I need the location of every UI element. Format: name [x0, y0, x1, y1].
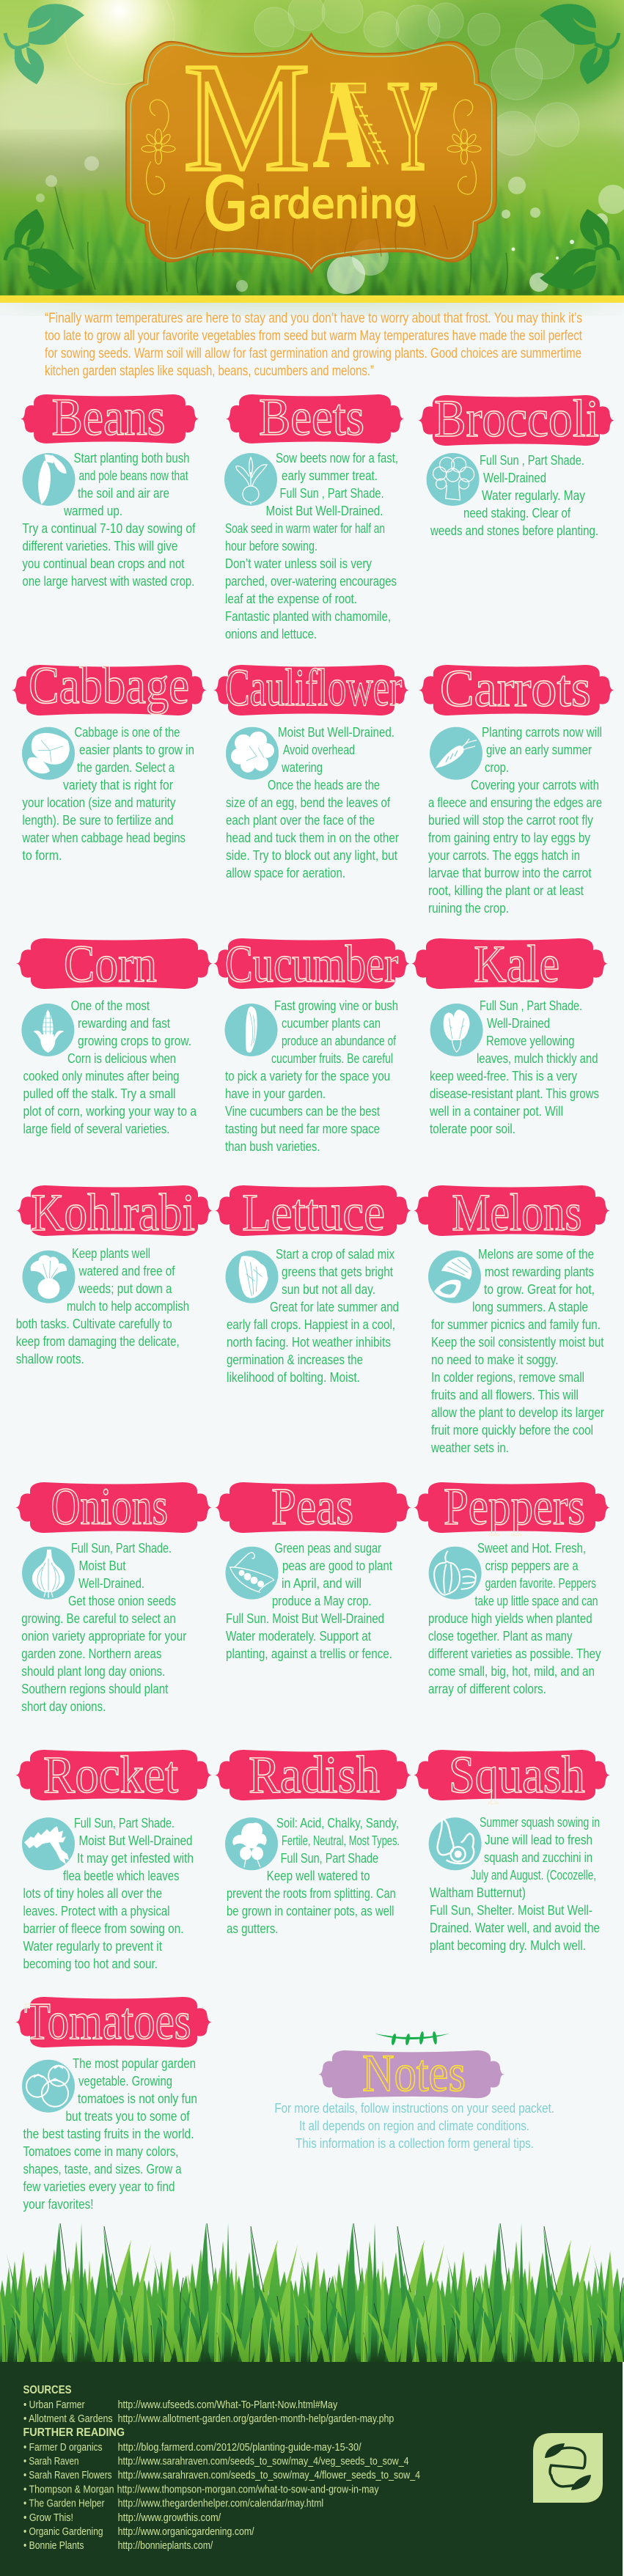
icon: rocket leaf [22, 1817, 75, 1870]
text: Rocket: Water regularly to prevent it [23, 1938, 162, 1954]
icon: beans [22, 453, 75, 506]
text: notes: This information is a collection form general tips. [296, 2135, 534, 2151]
heading: sources: SOURCES [23, 2384, 72, 2396]
text: Beets: hour before sowing. [225, 538, 317, 553]
text: Rocket: barrier of fleece from sowing on. [23, 1921, 183, 1936]
icon: melon [428, 1251, 481, 1303]
heading: Peas [215, 1477, 411, 1536]
text: Peppers: crisp peppers are a [485, 1558, 579, 1573]
text: Carrots: ruining the crop. [428, 900, 509, 916]
text: Beans: different varieties. This will give [22, 538, 177, 553]
text: Kale: leaves, mulch thickly and [477, 1050, 598, 1066]
text: Cauliflower: Once the heads are the [268, 777, 380, 792]
text: Cucumber [225, 998, 398, 1154]
text: Peas: Water moderately. Support at [226, 1628, 371, 1644]
list: sources: http://www.ufseeds.com/What-To-Plant-Now.html#May [118, 2399, 338, 2411]
list: further reading: http://www.organicgardening.com/ [118, 2526, 254, 2538]
heading: Corn: Corn [64, 935, 157, 993]
text: Kale: tolerate poor soil. [430, 1121, 515, 1136]
text: Corn [23, 998, 197, 1136]
panel: Carrots [419, 659, 614, 916]
text: Melons: fruits and all flowers. This will [431, 1387, 579, 1402]
text: Beets: Sow beets now for a fast, [276, 450, 398, 465]
text: Cabbage: easier plants to grow in [79, 742, 194, 757]
text: Melons: long summers. A staple [472, 1299, 588, 1314]
text: Melons: no need to make it soggy. [431, 1352, 559, 1367]
text: Peas: planting, against a trellis or fence. [226, 1646, 392, 1661]
text: Onions [21, 1540, 186, 1714]
text: Onions: Moist But [79, 1558, 126, 1573]
text: Corn: One of the most [71, 998, 150, 1013]
list: further reading: • Sarah Raven Flowers [23, 2470, 111, 2481]
panel: Squash [414, 1745, 610, 1953]
text: Cabbage: Cabbage is one of the [75, 724, 180, 740]
heading: Cabbage: Cabbage [29, 656, 189, 715]
text: Peas: Full Sun. Moist But Well-Drained [226, 1611, 384, 1626]
text: Kohlrabi: both tasks. Cultivate carefully to [16, 1316, 172, 1331]
text: Onions: growing. Be careful to select an [21, 1611, 176, 1626]
heading: Notes: Notes [362, 2044, 466, 2102]
text: Lettuce: Great for late summer and [270, 1299, 399, 1314]
text: Rocket: flea beetle which leaves [63, 1868, 179, 1883]
icon: onion [22, 1547, 75, 1600]
title: Gardening: G [203, 161, 249, 247]
text: Beets: Full Sun , Part Shade. [280, 485, 384, 501]
icon: broccoli [427, 453, 480, 506]
text: Radish: be grown in container pots, as well [227, 1903, 394, 1918]
intro text: kitchen garden staples like squash, beans, cucumbers and melons.” [45, 363, 374, 379]
text: Onions: garden zone. Northern areas [21, 1646, 161, 1661]
icon: leaf sprig [375, 2031, 449, 2045]
icon: cauliflower [226, 727, 279, 780]
heading: Cucumber: Cucumber [225, 935, 398, 993]
heading: Radish: Radish [249, 1745, 380, 1804]
text: Squash: Waltham Butternut) [430, 1885, 526, 1900]
text: Kale: well in a container pot. Will [429, 1103, 563, 1119]
heading: Beets: Beets [259, 388, 364, 446]
text: Cauliflower [226, 724, 399, 880]
text: Beets: parched, over-watering encourages [225, 573, 397, 589]
text: Cucumber: cucumber plants can [282, 1015, 381, 1031]
list: sources [23, 2399, 394, 2425]
text: Onions: Get those onion seeds [68, 1593, 176, 1608]
text: Cabbage: water when cabbage head begins [22, 830, 186, 845]
title: Gardening: ardening [249, 181, 418, 227]
text: Carrots: Covering your carrots with [471, 777, 599, 792]
text: Peppers: close together. Plant as many [428, 1628, 573, 1644]
heading: Beets [226, 388, 404, 446]
icon: logo [533, 2433, 603, 2503]
icon: tomatoes [22, 2060, 75, 2113]
panel: Tomatoes [15, 1992, 212, 2212]
text: Cauliflower: watering [281, 759, 323, 775]
text: Lettuce [227, 1246, 399, 1385]
heading: Onions: Onions [51, 1477, 168, 1536]
text: Tomatoes: tomatoes is not only fun [78, 2091, 197, 2106]
icon: cucumber [224, 1004, 277, 1056]
text: Cucumber: to pick a variety for the space you [225, 1068, 390, 1083]
text: Radish: Keep well watered to [267, 1868, 370, 1883]
text: Beans [22, 450, 196, 589]
text: Tomatoes [23, 2056, 197, 2212]
icon: corner leaf sprig bottom right [540, 209, 619, 290]
decoration: flower flourish left [142, 100, 175, 194]
text: Radish: Soil: Acid, Chalky, Sandy, [276, 1815, 399, 1830]
list: sources: http://www.allotment-garden.org/garden-month-help/garden-may.php [118, 2413, 394, 2425]
icon: corner leaf sprig bottom left [5, 209, 84, 290]
text: Corn: growing crops to grow. [78, 1033, 191, 1048]
text: Beans: and pole beans now that [79, 468, 188, 483]
text: Onions: Full Sun, Part Shade. [71, 1540, 172, 1556]
icon: carrot [430, 727, 482, 780]
text: Tomatoes: shapes, taste, and sizes. Grow a [23, 2161, 182, 2176]
panel: Radish [215, 1745, 411, 1936]
heading: Kale [411, 935, 608, 993]
heading: Peas: Peas [271, 1477, 353, 1536]
text: Kale: keep weed-free. This is a very [430, 1068, 578, 1083]
text: Cauliflower: size of an egg, bend the leaves of [226, 795, 391, 810]
text: Radish: Fertile, Neutral, Most Types. [282, 1833, 400, 1848]
text: Cabbage: to form. [22, 847, 62, 863]
heading: Squash: Squash [449, 1745, 585, 1804]
text: Cauliflower: allow space for aeration. [226, 865, 345, 880]
heading: Melons: Melons [452, 1183, 582, 1242]
text: Lettuce: germination & increases the [227, 1352, 363, 1367]
text: Lettuce: early fall crops. Happiest in a cool, [227, 1317, 395, 1332]
text: Carrots: root, killing the plant or at least [428, 883, 584, 898]
text: Cabbage: variety that is right for [63, 777, 173, 792]
text: Beets [225, 450, 398, 641]
text: Cabbage: your location (size and maturity [22, 795, 176, 810]
icon: corner leaf sprig top right [540, 4, 619, 84]
icon: squash [429, 1817, 482, 1870]
list: further reading: http://www.sarahraven.com/seeds_to_sow/may_4/flower_seeds_to_sow_4 [118, 2470, 420, 2481]
text: Beets: onions and lettuce. [225, 626, 317, 641]
heading: Broccoli: Broccoli [434, 389, 599, 448]
heading: further reading: FURTHER READING [23, 2426, 125, 2439]
panel: Beets [224, 388, 404, 641]
panel: Peas [215, 1477, 411, 1661]
text: Kohlrabi: watered and free of [78, 1263, 175, 1278]
text: Melons: to grow. Great for hot, [484, 1281, 595, 1297]
text: Cauliflower: Moist But Well-Drained. [278, 724, 394, 740]
text: Lettuce: greens that gets bright [282, 1264, 393, 1279]
illustration: grass [0, 2223, 624, 2362]
panel: Peppers [414, 1477, 610, 1696]
text: Carrots: your carrots. The eggs hatch in [428, 847, 580, 863]
text: Beets: Moist But Well-Drained. [265, 503, 383, 518]
text: Kohlrabi: mulch to help accomplish [67, 1298, 189, 1314]
text: Corn: rewarding and fast [78, 1015, 170, 1031]
text: Squash: squash and zucchini in [484, 1850, 592, 1865]
text: Cucumber: have in your garden. [225, 1086, 326, 1101]
text: Lettuce: sun but not all day. [282, 1281, 375, 1297]
text: Beans: one large harvest with wasted crop. [22, 573, 194, 589]
text: Tomatoes: the best tasting fruits in the world. [23, 2126, 194, 2141]
text: Kale [429, 998, 599, 1136]
text: Carrots: from gaining entry to lay eggs by [428, 830, 591, 845]
list: sources: • Urban Farmer [23, 2399, 85, 2411]
text: Kohlrabi: weeds; put down a [78, 1281, 172, 1296]
text: Squash: plant becoming dry. Mulch well. [430, 1937, 586, 1953]
text: Peas [226, 1540, 392, 1661]
icon: beet [224, 453, 277, 506]
text: Beets: early summer treat. [282, 468, 378, 483]
text: Broccoli [430, 452, 598, 538]
text: Peas: produce a May crop. [272, 1593, 371, 1608]
panel: footer [0, 2362, 623, 2576]
text: Peppers: array of different colors. [428, 1681, 546, 1696]
heading: Peppers: Peppers [444, 1477, 585, 1536]
icon: peppers [429, 1547, 482, 1600]
list: further reading: • Sarah Raven [23, 2456, 79, 2468]
text: Cucumber: cucumber fruits. Be careful [271, 1050, 393, 1066]
heading: Tomatoes: Tomatoes [24, 1992, 191, 2050]
text: Beans: warmed up. [63, 503, 122, 518]
list: further reading: • Grow This! [23, 2512, 73, 2524]
list: further reading: • The Garden Helper [23, 2498, 105, 2510]
heading: Kale: Kale [474, 935, 559, 993]
text: Tomatoes: few varieties every year to find [23, 2179, 175, 2194]
text: Kale: Full Sun , Part Shade. [480, 998, 582, 1013]
text: Tomatoes: Tomatoes come in many colors, [23, 2143, 179, 2159]
panel: Notes [274, 2031, 554, 2151]
text: Radish: Full Sun, Part Shade [281, 1850, 378, 1866]
list: further reading: http://www.sarahraven.com/seeds_to_sow/may_4/veg_seeds_to_sow_4 [118, 2456, 409, 2468]
text: Corn: cooked only minutes after being [23, 1068, 179, 1083]
text: Peas: in April, and will [282, 1575, 361, 1591]
list: further reading: • Farmer D organics [23, 2442, 103, 2454]
text: Cauliflower: side. Try to block out any light, but [226, 847, 397, 863]
text: Tomatoes: The most popular garden [73, 2056, 196, 2071]
text: Cucumber: Vine cucumbers can be the best [225, 1103, 380, 1119]
text: Lettuce: Start a crop of salad mix [276, 1246, 395, 1262]
list: further reading: http://www.thompson-morgan.com/what-to-sow-and-grow-in-may [117, 2484, 379, 2495]
text: Cucumber: than bush varieties. [225, 1138, 320, 1154]
text: Onions: short day onions. [21, 1699, 106, 1714]
text: Broccoli: Well-Drained [483, 470, 546, 485]
text: Beets: Don’t water unless soil is very [225, 556, 372, 571]
text: Corn: plot of corn, working your way to a [23, 1103, 197, 1119]
yellow divider band [0, 295, 624, 303]
text: Kohlrabi: Keep plants well [72, 1245, 150, 1261]
text: Cabbage [22, 724, 194, 863]
text: Peas: peas are good to plant [282, 1558, 392, 1573]
list: further reading: http://blog.farmerd.com/2012/05/planting-guide-may-15-30/ [118, 2442, 361, 2454]
text: Rocket: becoming too hot and sour. [23, 1956, 158, 1971]
title: May: M [183, 31, 310, 203]
panel: Onions [15, 1477, 212, 1714]
text: Corn: Corn is delicious when [67, 1050, 176, 1066]
text: Radish [227, 1815, 400, 1936]
text: Cauliflower: each plant over the face of the [226, 812, 375, 828]
text: notes [274, 2100, 554, 2151]
icon: radish [225, 1817, 278, 1870]
icon: corn [21, 1004, 74, 1056]
heading: Rocket: Rocket [43, 1745, 178, 1804]
text: Squash [430, 1814, 600, 1953]
text: Lettuce: likelihood of bolting. Moist. [227, 1369, 360, 1385]
text: Peppers: produce high yields when planted [428, 1611, 592, 1626]
text: Tomatoes: your favorites! [23, 2196, 94, 2212]
text: Rocket: leaves. Protect with a physical [23, 1903, 170, 1918]
icon: kohlrabi [22, 1251, 75, 1303]
header photo: sunny grass meadow [0, 0, 624, 304]
text: Lettuce: north facing. Hot weather inhibits [227, 1334, 391, 1350]
panel: Cauliflower [213, 658, 409, 880]
text: Peppers: Sweet and Hot. Fresh, [477, 1540, 586, 1556]
text: Melons: Melons are some of the [478, 1246, 594, 1262]
text: Onions: onion variety appropriate for your [21, 1628, 186, 1644]
text: Kohlrabi [16, 1245, 189, 1366]
text: Melons: fruit more quickly before the cool [431, 1422, 593, 1438]
heading: Cauliflower [213, 658, 409, 717]
text: Melons: In colder regions, remove small [431, 1369, 584, 1385]
text: Onions: should plant long day onions. [21, 1663, 165, 1679]
panel: Rocket [15, 1745, 212, 1971]
text: Cucumber: tasting but need far more space [225, 1121, 380, 1136]
panel: Lettuce [215, 1183, 411, 1385]
text: Rocket: Full Sun, Part Shade. [74, 1815, 175, 1830]
heading: Notes [318, 2044, 504, 2102]
text: Beets: Soak seed in warm water for half an [225, 520, 385, 536]
list: further reading: http://www.growthis.com/ [118, 2512, 221, 2524]
text: Squash: Full Sun, Shelter. Moist But Well- [430, 1902, 592, 1918]
text: Corn: large field of several varieties. [23, 1121, 170, 1136]
text: Melons: most rewarding plants [485, 1264, 594, 1279]
text: Cucumber: produce an abundance of [282, 1033, 397, 1048]
text: notes: It all depends on region and climate conditions. [299, 2118, 529, 2133]
list: further reading: • Organic Gardening [23, 2526, 103, 2538]
text: Radish: prevent the roots from splitting. Can [227, 1885, 396, 1901]
text: Melons [430, 1246, 604, 1455]
text: Kale: Remove yellowing [486, 1033, 575, 1048]
panel: Beans [21, 388, 199, 589]
title: May: Y [388, 54, 438, 196]
title plaque [126, 34, 496, 273]
panel: Broccoli [418, 389, 614, 538]
text: Cabbage: length). Be sure to fertilize and [22, 812, 173, 828]
text: Tomatoes: vegetable. Growing [78, 2073, 172, 2089]
icon: pea pod [226, 1547, 279, 1600]
text: Radish: as gutters. [227, 1921, 279, 1936]
text: Broccoli: need staking. Clear of [463, 505, 571, 520]
list: further reading: • Bonnie Plants [23, 2540, 84, 2552]
panel: Cabbage [12, 656, 207, 863]
text: Carrots: larvae that burrow into the carrot [428, 865, 591, 880]
text: Carrots [428, 724, 602, 916]
list: further reading: • Thompson & Morgan [23, 2484, 114, 2495]
text: Carrots: crop. [485, 759, 509, 775]
text: Beans: Start planting both bush [73, 450, 189, 465]
heading: Cauliflower: Cauliflower [225, 658, 402, 717]
text: Rocket: Moist But Well-Drained [79, 1833, 192, 1848]
text: Carrots: buried will stop the carrot root fly [428, 812, 594, 828]
icon: kale [430, 1004, 483, 1056]
text: Onions: Well-Drained. [78, 1575, 144, 1591]
text: Cauliflower: Avoid overhead [283, 742, 355, 757]
panel: Kohlrabi [16, 1183, 213, 1366]
intro text [45, 310, 582, 379]
text: Kohlrabi: shallow roots. [16, 1351, 84, 1366]
text: Melons: weather sets in. [430, 1440, 509, 1455]
icon: lettuce [226, 1251, 279, 1303]
text: Corn: pulled off the stalk. Try a small [23, 1086, 176, 1101]
text: Tomatoes: but treats you to some of [66, 2108, 190, 2124]
text: Peppers [428, 1540, 601, 1696]
text: Rocket: It may get infested with [77, 1850, 194, 1866]
text: Rocket [23, 1815, 194, 1971]
heading: Kohlrabi: Kohlrabi [31, 1183, 195, 1242]
text: Beets: leaf at the expense of root. [225, 591, 357, 606]
icon: corner leaf sprig top left [5, 4, 84, 84]
heading: Corn [16, 935, 213, 993]
list: further reading: http://www.thegardenhelper.com/calendar/may.html [118, 2498, 323, 2510]
text: Cabbage: the garden. Select a [77, 759, 175, 775]
text: Beans: you continual bean crops and not [22, 556, 184, 571]
text: Kohlrabi: keep from damaging the delicate, [16, 1333, 180, 1349]
icon: cabbage [22, 727, 75, 780]
panel: Melons [414, 1183, 610, 1455]
text: Carrots: give an early summer [486, 742, 592, 757]
panel: Corn [16, 935, 213, 1136]
decoration: flower flourish right [447, 100, 481, 194]
text: Beets: Fantastic planted with chamomile, [225, 608, 391, 624]
text: Kale: Well-Drained [487, 1015, 550, 1031]
text: Carrots: Planting carrots now will [482, 724, 602, 740]
text: Peas: Green peas and sugar [274, 1540, 381, 1556]
panel: Cucumber [213, 935, 410, 1154]
heading: Beans: Beans [51, 388, 166, 446]
heading: Carrots: Carrots [440, 659, 591, 718]
text: Rocket: lots of tiny holes all over the [23, 1885, 162, 1901]
text: Beans: the soil and air are [78, 485, 169, 501]
text: Broccoli: Water regularly. May [482, 487, 586, 503]
text: Cucumber: Fast growing vine or bush [274, 998, 398, 1013]
text: Beans: Try a continual 7-10 day sowing of [22, 520, 196, 536]
panel: Kale [411, 935, 608, 1136]
heading: Lettuce: Lettuce [242, 1183, 385, 1242]
text: Squash: June will lead to fresh [485, 1832, 592, 1847]
icon: ladder on the letter A [331, 84, 388, 164]
text: Cauliflower: head and tuck them in on the other [226, 830, 399, 845]
text: Onions: Southern regions should plant [21, 1681, 168, 1696]
list: further reading [23, 2442, 420, 2552]
list: further reading: http://bonnieplants.com/ [118, 2540, 213, 2552]
list: sources: • Allotment & Gardens [23, 2413, 113, 2425]
text: Broccoli: Full Sun , Part Shade. [480, 452, 584, 468]
text: notes: For more details, follow instructions on your seed packet. [274, 2100, 554, 2116]
title: May: A [312, 56, 371, 195]
